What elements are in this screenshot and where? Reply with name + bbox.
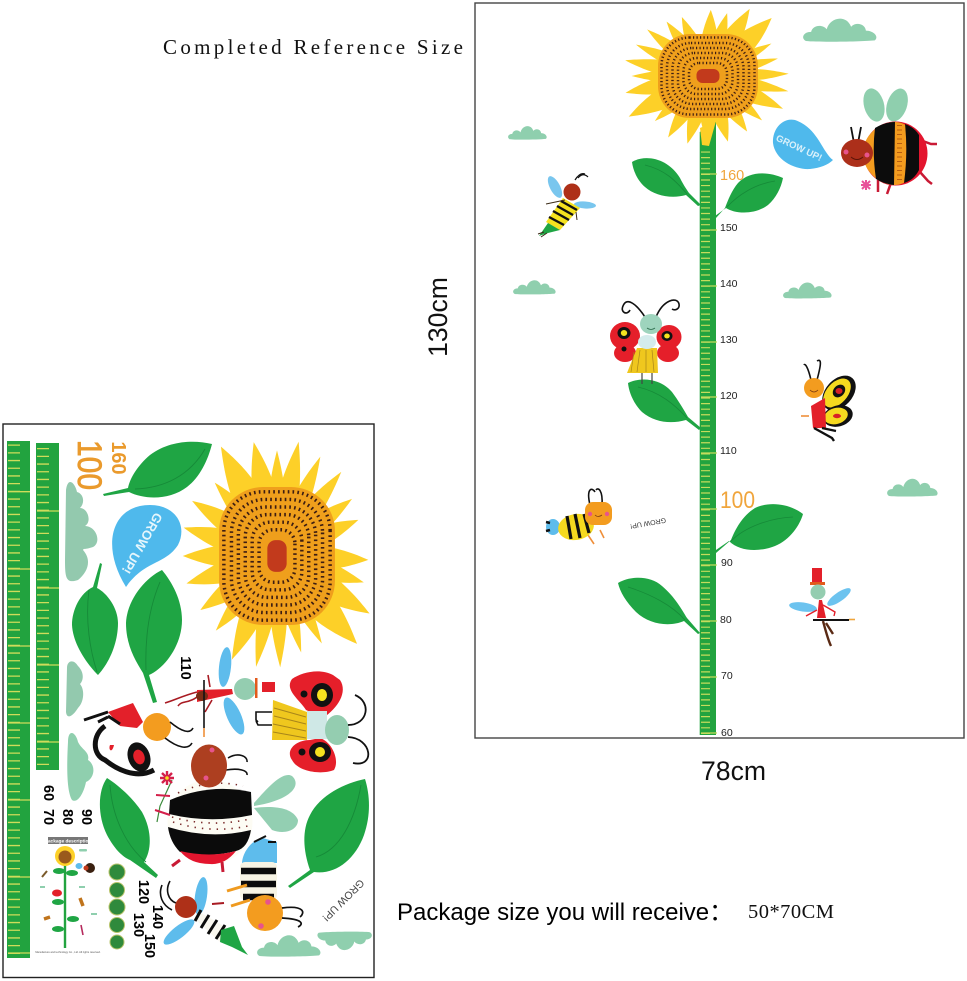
sheet ruler: short strip <box>36 443 59 770</box>
sheet label numbers 120 to 150: 130 <box>130 913 146 937</box>
sheet label: 160: 160 <box>107 441 129 475</box>
big bee <box>841 86 937 194</box>
sheet leaf: top <box>103 442 212 497</box>
height labels: 120 <box>720 390 738 402</box>
small mirrored grow up text: GROW UP! <box>629 516 666 529</box>
sheet label numbers 120 to 150: 140 <box>149 905 165 929</box>
orange headed butterfly <box>801 360 862 441</box>
package description tag <box>45 837 91 844</box>
sunflower <box>622 5 790 145</box>
lower left bee <box>546 489 612 544</box>
sheet cloud: small vertical <box>66 661 83 716</box>
sheet leaf: lower left <box>100 778 158 878</box>
sheet leaf: lower right <box>288 779 369 888</box>
package description tag: Package description <box>45 838 91 844</box>
top hat insect <box>789 568 855 646</box>
mini preview of finished chart: Manufacture and technology Co., Ltd. All rights reserved. <box>35 950 101 954</box>
sheet label numbers 60 70 80 90: 80 <box>59 809 75 825</box>
height labels: 100 <box>720 487 755 514</box>
sheet label numbers 60 70 80 90: 70 <box>40 809 56 825</box>
caption: completed reference size: Completed Reference Size <box>163 35 463 59</box>
cloud: upper left <box>508 126 547 140</box>
sheet top hat insect <box>165 646 275 737</box>
sheet sunflower <box>181 437 375 669</box>
sheet label: 110: 110 <box>177 656 193 680</box>
sheet label numbers 60 70 80 90: 60 <box>40 785 56 801</box>
leaf: right at 100 <box>716 504 803 553</box>
leaf: upper left <box>632 158 701 206</box>
mini preview of finished chart <box>35 846 101 954</box>
sheet clouds: bottom pair <box>257 932 372 957</box>
height labels: 70 <box>721 670 733 682</box>
sheet bubble: grow up: GROW UP! <box>119 510 166 576</box>
height labels: 60 <box>721 727 733 739</box>
cloud: middle left <box>513 280 556 294</box>
sheet orange butterfly <box>84 703 193 775</box>
sheet cloud: lower vertical <box>67 733 93 801</box>
leaf: upper right <box>715 173 783 218</box>
panel: sticker sheet layout <box>3 424 375 978</box>
height labels: 110 <box>720 445 737 457</box>
sheet ruler: long strip <box>7 441 30 958</box>
sheet label numbers 120 to 150 <box>130 880 165 958</box>
panel: completed size chart <box>475 3 964 739</box>
height labels: 130 <box>720 334 738 346</box>
height labels: 160 <box>720 168 744 184</box>
dimension: 130cm height: 130cm <box>423 277 453 357</box>
sheet label: 100: 100 <box>70 440 108 490</box>
sheet cloud: vertical one <box>65 482 97 581</box>
caption: package size: Package size you will receive： <box>397 899 733 926</box>
sheet big bee <box>155 744 298 872</box>
round sample badges <box>109 864 125 949</box>
height labels: 140 <box>720 278 738 290</box>
cloud: middle right <box>783 282 832 298</box>
cloud: top right <box>803 19 876 42</box>
small striped bee <box>538 174 596 237</box>
leaf: middle left <box>628 380 701 430</box>
sheet red butterfly <box>256 671 368 772</box>
sheet leaf: broad <box>126 570 182 703</box>
sheet label numbers 120 to 150: 150 <box>141 934 157 958</box>
height labels: 90 <box>721 557 733 569</box>
sheet bubble: grow up <box>112 505 181 587</box>
speech bubble: grow up: GROW UP! <box>774 133 824 164</box>
caption: package size: 50*70CM <box>748 901 834 923</box>
sheet grow up text: GROW UP! <box>320 877 366 923</box>
height labels: 150 <box>720 222 738 234</box>
sheet label numbers 60 70 80 90: 90 <box>78 809 94 825</box>
height labels <box>720 168 755 739</box>
butterfly on leaf <box>610 300 682 384</box>
stem and height ruler <box>700 121 717 735</box>
height labels: 80 <box>720 614 732 626</box>
leaf: lower left <box>618 578 700 634</box>
sheet label numbers 60 70 80 90 <box>40 785 94 825</box>
cloud: lower right <box>887 479 938 497</box>
speech bubble: grow up <box>773 120 833 169</box>
sheet small bee <box>227 836 303 931</box>
sheet leaf: narrow <box>72 563 118 675</box>
dimension: 78cm width: 78cm <box>701 756 766 786</box>
sheet dragonfly <box>160 876 248 955</box>
sheet label numbers 120 to 150: 120 <box>135 880 151 904</box>
